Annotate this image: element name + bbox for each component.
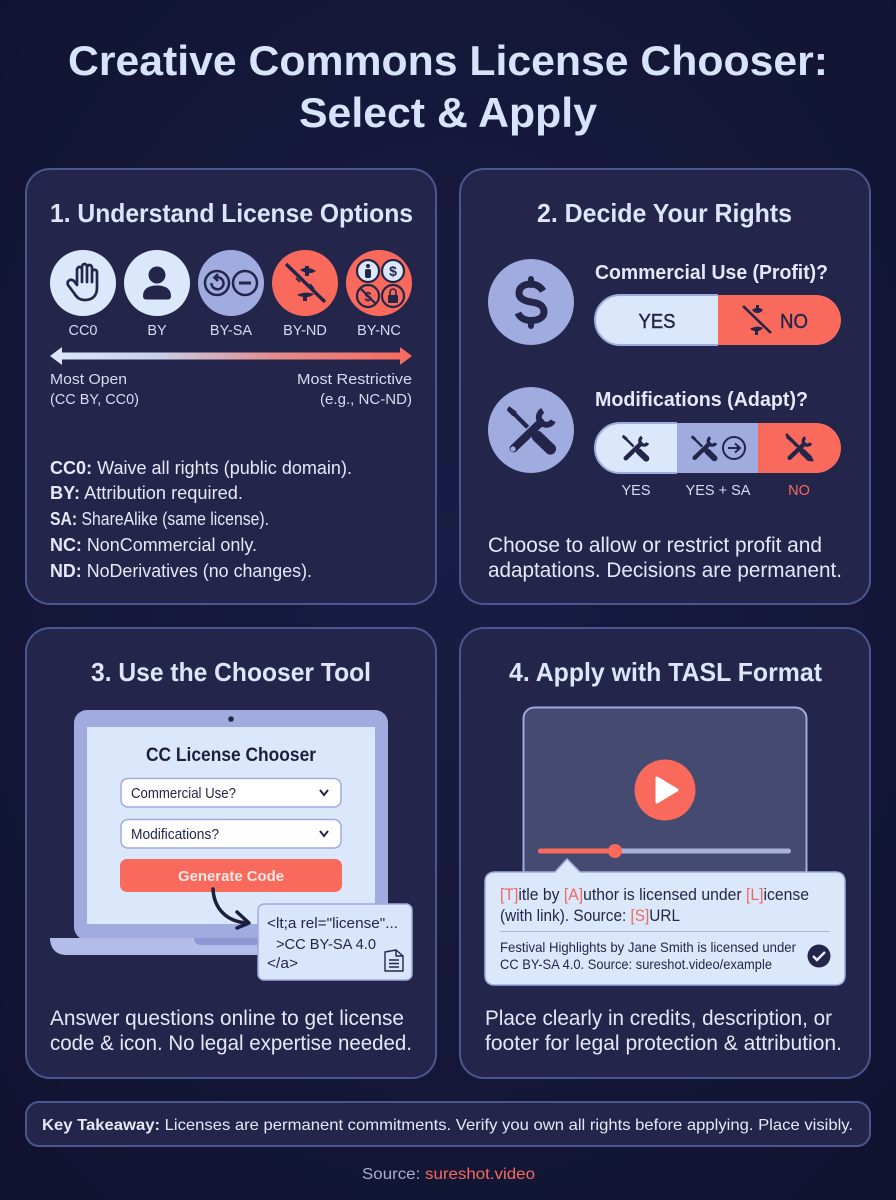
dropdown: modifications: Modifications? xyxy=(131,827,219,843)
label: most open xyxy=(50,371,139,408)
label: most open: Most Open xyxy=(50,371,127,388)
text: chooser note: code & icon. No legal expertise needed. xyxy=(50,1032,412,1055)
key takeaway bar xyxy=(26,1102,870,1146)
heading: step 2: 2. Decide Your Rights xyxy=(537,198,792,228)
source: Source: sureshot.video xyxy=(362,1166,535,1183)
toggle: commercial yes/no: NO xyxy=(780,311,808,333)
arrow: open to restrictive spectrum xyxy=(50,347,412,365)
icon: BY-NC: $ xyxy=(389,263,397,279)
label: most open: (CC BY, CC0) xyxy=(50,391,139,408)
TASL example xyxy=(500,939,796,972)
title: Creative Commons License Chooser: xyxy=(68,37,828,84)
TASL example: Festival Highlights by Jane Smith is licensed under xyxy=(500,939,796,955)
code snippet: <lt;a rel="license"... xyxy=(267,915,398,932)
license labels: BY-NC xyxy=(357,323,401,339)
code snippet: </a> xyxy=(267,955,298,972)
title: Select & Apply xyxy=(299,89,598,136)
progress bar xyxy=(538,844,791,858)
dropdown: modifications xyxy=(121,820,341,848)
icon: tools xyxy=(488,387,574,473)
panel: use the chooser tool xyxy=(26,628,436,1078)
code snippet xyxy=(258,904,412,980)
code snippet: >CC BY-SA 4.0 xyxy=(276,936,376,953)
panel: apply with TASL format xyxy=(460,628,870,1078)
heading: step 4: 4. Apply with TASL Format xyxy=(509,657,822,687)
option labels: YES + SA xyxy=(686,483,751,499)
TASL formula: (with link). Source: [S]URL xyxy=(500,906,680,925)
icon: CC0 hand xyxy=(50,250,116,316)
text: apply note xyxy=(485,1007,842,1055)
license labels: BY-SA xyxy=(210,323,252,339)
license definitions: CC0: Waive all rights (public domain). xyxy=(50,458,352,478)
icon: check xyxy=(808,944,830,968)
license labels: CC0 xyxy=(68,323,98,339)
icon: BY-NC: $ xyxy=(364,289,372,304)
license definitions: BY: Attribution required. xyxy=(50,483,243,503)
text: rights note xyxy=(488,534,842,582)
license definitions: SA: ShareAlike (same license). xyxy=(50,509,269,529)
license definitions xyxy=(50,458,352,581)
laptop xyxy=(50,710,412,955)
label: most restrictive: (e.g., NC-ND) xyxy=(320,391,412,408)
icon: dollar xyxy=(488,259,574,345)
arrow: button to code xyxy=(213,889,249,928)
license labels: BY-ND xyxy=(283,323,327,339)
label: most restrictive xyxy=(297,371,412,408)
icon: BY person xyxy=(124,250,190,316)
option labels: NO xyxy=(788,483,810,499)
video player xyxy=(524,708,806,888)
TASL formula xyxy=(500,885,809,925)
label: most restrictive: Most Restrictive xyxy=(297,371,412,388)
TASL callout xyxy=(485,859,845,985)
license labels xyxy=(68,323,401,339)
heading: step 1: 1. Understand License Options xyxy=(50,198,413,228)
TASL example: CC BY-SA 4.0. Source: sureshot.video/example xyxy=(500,956,772,972)
button: generate code xyxy=(120,859,342,892)
icon: BY-NC xyxy=(346,250,412,316)
option labels: YES xyxy=(621,483,651,499)
question: commercial use: Commercial Use (Profit)? xyxy=(595,262,828,284)
panel: understand license options xyxy=(26,169,436,604)
dropdown: commercial use: Commercial Use? xyxy=(131,786,236,802)
heading: step 3: 3. Use the Chooser Tool xyxy=(91,657,371,687)
toggle: commercial yes/no xyxy=(595,295,841,345)
TASL formula: [T]itle by [A]uthor is licensed under [L]icense xyxy=(500,885,809,904)
license definitions: NC: NonCommercial only. xyxy=(50,535,257,555)
title xyxy=(68,37,828,136)
icon: BY-ND xyxy=(272,250,338,316)
text: chooser note xyxy=(50,1007,412,1055)
question: modifications: Modifications (Adapt)? xyxy=(595,389,808,411)
text: chooser note: Answer questions online to get license xyxy=(50,1007,404,1030)
chooser heading: CC License Chooser xyxy=(146,744,316,766)
button: generate code: Generate Code xyxy=(178,868,284,885)
toggle: commercial yes/no: YES xyxy=(638,311,676,333)
icon: document xyxy=(385,950,403,971)
text: rights note: adaptations. Decisions are permanent. xyxy=(488,559,842,582)
icon: play button xyxy=(634,760,696,820)
text: rights note: Choose to allow or restrict profit and xyxy=(488,534,822,557)
license labels: BY xyxy=(147,323,167,339)
toggle: modifications options xyxy=(595,423,841,473)
text: apply note: footer for legal protection & attribution. xyxy=(485,1032,842,1055)
license definitions: ND: NoDerivatives (no changes). xyxy=(50,561,312,581)
option labels xyxy=(621,483,810,499)
icon: BY-SA xyxy=(198,250,264,316)
key takeaway bar: Key Takeaway: Licenses are permanent commitments. Verify you own all rights before applying. Place visibly. xyxy=(42,1117,853,1134)
panel: decide your rights xyxy=(460,169,870,604)
text: apply note: Place clearly in credits, description, or xyxy=(485,1007,832,1030)
dropdown: commercial use xyxy=(121,778,341,807)
